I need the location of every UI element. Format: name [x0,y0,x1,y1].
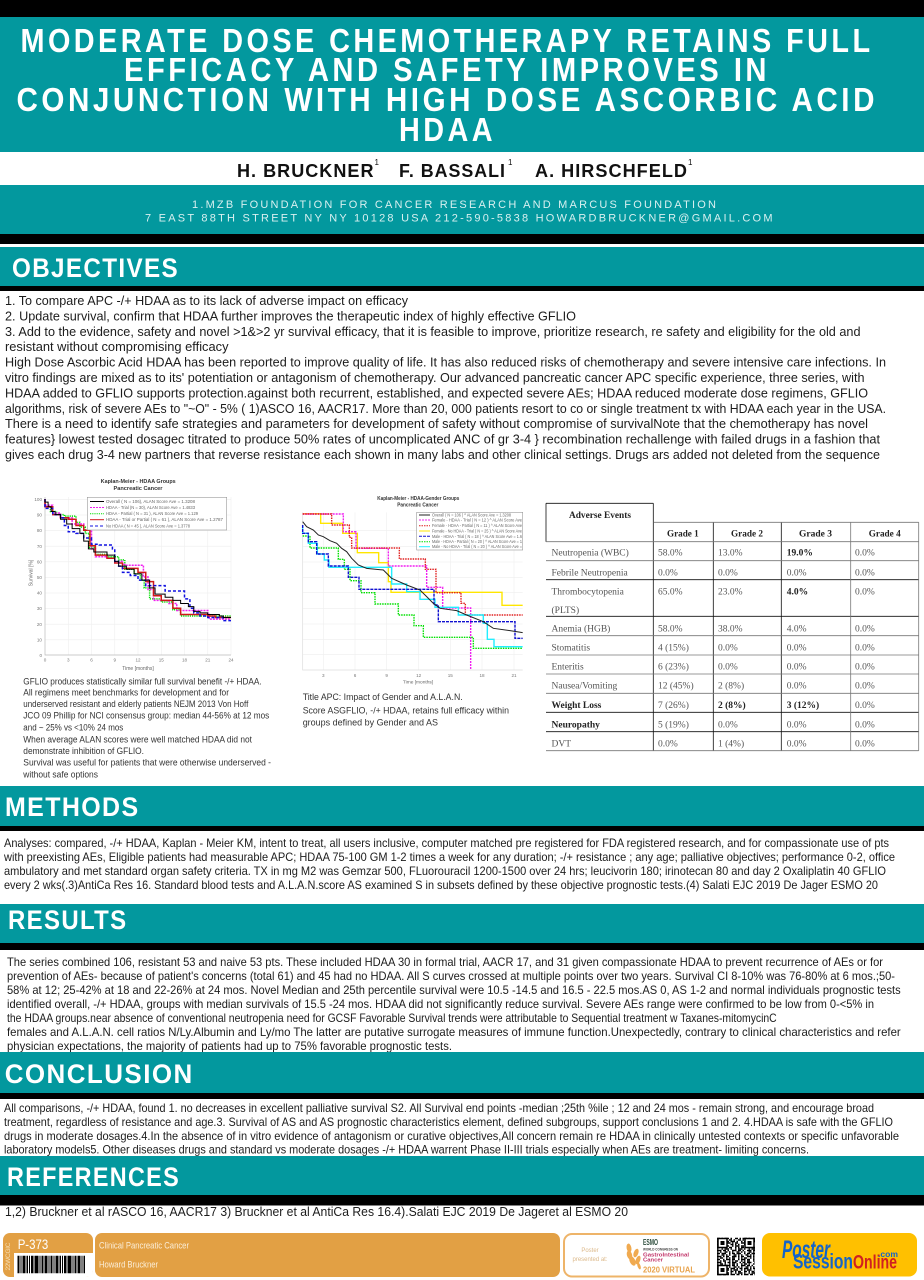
affiliation band: 7 EAST 88TH STREET NY NY 10128 USA 212-590-5838 HOWARDBRUCKNER@GMAIL.COM [145,212,772,224]
chart: Kaplan-Meier HDAA groups: 24 [228,658,234,662]
table header: Grade 4 [869,530,901,540]
chart: Kaplan-Meier HDAA gender groups: 9 [385,673,388,678]
title: EFFICACY AND SAFETY IMPROVES IN [124,52,770,89]
table rows: 0.0% [855,682,875,692]
table rows: 58.0% [658,624,683,634]
chart: Kaplan-Meier HDAA groups: 70 [37,544,42,549]
table rows: 0.0% [658,569,678,579]
icon: wheat [626,1243,642,1270]
table rows: 0.0% [855,624,875,634]
table rows: 1 (4%) [718,739,744,750]
chart: Kaplan-Meier HDAA gender groups: Time [months] [403,680,433,686]
authors: 1 [374,158,380,167]
table rows: 0.0% [855,701,875,711]
chart legend [87,497,227,530]
title [16,23,878,149]
chart legend: Overall ( N = 106), ALAN Score Ave = 1.3208 [106,499,196,504]
chart: Kaplan-Meier HDAA groups: 10 [37,637,42,642]
chart legend: Female - No HDAA - Trial ( N = 25 ) ^ ALAN Score Ave [432,528,522,534]
footer: congress badge: 2020 VIRTUAL [643,1265,695,1274]
chart legend: Male - HDAA - Partial ( N = 20 ) ^ ALAN Score Ave = 1 [432,539,522,544]
objectives text: HDAA added to GFLIO supports protection.against both recurrent, established, and expected severe AEs; HDAA reduced moderate dose regimens, GFLIO [5,386,868,400]
table rows: 0.0% [658,740,678,750]
table rows: 58.0% [658,549,683,559]
chart: Kaplan-Meier HDAA groups: 3 [67,658,70,662]
table rows: 0.0% [787,740,807,750]
icon: barcode [18,1256,85,1273]
table rows: 38.0% [718,624,743,634]
table rows: 23.0% [718,588,743,598]
authors: F. BASSALI [399,161,506,181]
chart: Kaplan-Meier HDAA gender groups [303,496,523,686]
footer: congress badge: GastroIntestinal [643,1253,690,1259]
chart: Kaplan-Meier HDAA gender groups: 12 [416,673,422,678]
references text: 1,2) Bruckner et al rASCO 16, AACR17 3) Bruckner et al AntiCa Res 16.4).Salati EJC 2019 De Jageret al ESMO 20 [5,1205,628,1219]
caption: chart one: underserved resistant and elderly patients NEJM 2013 Von Hoff [23,699,249,709]
objectives text: vitro findings are mixed as to its' potentiation or antagonism of chemotherapy. Our advanced pancreatic cancer APC specific experience, three series, with [5,371,865,385]
footer: topic and presenter: Clinical Pancreatic Cancer [99,1240,189,1250]
heading: references: REFERENCES [7,1162,180,1192]
table rows: 6 (23%) [658,662,689,673]
chart: Kaplan-Meier HDAA groups: 0 [44,658,47,662]
table rows: 0.0% [855,720,875,730]
results text: females and A.L.A.N. cell ratios N/Ly.Albumin and Ly/mo The latter are putative surrogate measures of immune function.Unexpectedly, contrary to clinical characteristics and refer [7,1025,901,1039]
table rows: 4.0% [787,624,807,634]
objectives text [5,294,886,462]
chart: Kaplan-Meier HDAA groups: 100 [34,497,42,502]
chart: Kaplan-Meier HDAA groups: 20 [37,622,42,627]
logo: Poster Session Online [762,1233,917,1276]
table rows: 0.0% [855,588,875,598]
table rows: 3 (12%) [787,700,819,711]
table rows: 0.0% [855,663,875,673]
table rows: 0.0% [787,682,807,692]
caption: chart two: Score ASGFLIO, -/+ HDAA, retains full efficacy within [303,706,509,716]
chart: Kaplan-Meier HDAA groups: 12 [135,658,141,662]
table rows: 0.0% [787,720,807,730]
chart legend [417,512,523,550]
table header: Grade 1 [667,530,699,540]
chart legend: No HDAA ( N = 45 ), ALAN Score Ave = 1.3778 [106,524,191,528]
footer: topic and presenter: Howard Bruckner [99,1260,158,1270]
caption: chart two: groups defined by Gender and AS [303,718,438,728]
table rows: 65.0% [658,588,683,598]
objectives text: algorithms, risk of severe AEs to "~O" - 5% ( 1)ASCO 16, AACR17. More than 20, 000 patients resort to co or single treatment tx with HDAA each year in the USA. [5,402,886,416]
heading: conclusion: CONCLUSION [5,1059,194,1089]
authors: A. HIRSCHFELD [535,161,688,181]
caption: chart one: When average ALAN scores were well matched HDAA did not [23,734,253,744]
table rows: Enteritis [552,663,584,673]
heading: methods [0,786,924,831]
results text: the HDAA groups.near absence of conventional neutropenia need for GCSF Favorable Survival trends were attributable to Sequential treatment w Taxanes-mitomycinC [7,1011,777,1025]
table rows: 0.0% [787,569,807,579]
footer: congress badge: Poster [581,1248,599,1254]
caption: chart two [303,692,509,728]
chart: Kaplan-Meier HDAA gender groups: 15 [448,673,453,678]
caption: chart two: Title APC: Impact of Gender and A.L.A.N. [303,692,463,702]
table header: Adverse Events [569,511,631,521]
table rows: 2 (8%) [718,681,744,692]
chart: Kaplan-Meier HDAA groups: Time [months] [122,666,154,672]
table rows: 0.0% [855,644,875,654]
conclusion text [4,1101,899,1156]
logo: Poster Session Online: Online [853,1252,897,1274]
table rows: 0.0% [718,644,738,654]
methods text [3,836,895,892]
chart: Kaplan-Meier HDAA gender groups: 18 [479,673,485,678]
chart: Kaplan-Meier HDAA groups: Pancreatic Cancer [114,486,163,492]
chart: Kaplan-Meier HDAA groups: 40 [37,591,42,596]
table rows: 5 (19%) [658,719,689,730]
caption: chart one: demonstrate inhibition of GFLIO. [23,746,144,756]
caption: chart one [22,677,271,779]
heading: objectives [0,247,924,291]
chart legend: HDAA - Trial or Partial ( N = 61 ), ALAN Score Ave = 1.2787 [106,517,224,522]
heading: objectives: OBJECTIVES [12,253,179,283]
table rows: 12 (45%) [658,681,694,692]
table rows: (PLTS) [552,605,579,616]
table rows: 0.0% [718,720,738,730]
chart: Kaplan-Meier HDAA groups: 18 [182,658,187,662]
table rows: 4 (15%) [658,643,689,654]
authors: 1 [688,158,693,167]
footer: poster id and barcode: 22WCGIC [5,1242,12,1270]
table rows: Neutropenia (WBC) [552,548,629,559]
chart: Kaplan-Meier HDAA gender groups: 6 [354,673,357,678]
table rows: 0.0% [855,549,875,559]
table rows: 0.0% [855,569,875,579]
affiliation band [0,185,924,244]
objectives text: 2. Update survival, confirm that HDAA further improves the therapeutic index of highly effective GFLIO [5,309,576,323]
caption: chart one: JCO 09 Phillip for NCI consensus group: median 44-56% at 12 mos [23,711,270,721]
chart legend: HDAA - Trial (N = 30), ALAN Score Ave = 1.4833 [106,505,196,510]
footer: poster id and barcode [3,1233,93,1277]
table rows: 0.0% [787,663,807,673]
chart: Kaplan-Meier HDAA groups: 90 [37,513,42,518]
chart: Kaplan-Meier HDAA groups: 0 [39,653,42,658]
table rows: 0.0% [787,644,807,654]
chart: Kaplan-Meier HDAA groups [28,479,234,672]
heading: results: RESULTS [8,905,128,935]
results text: physician expectations, the majority of patients had up to 75% favorable prognostic tests. [7,1039,452,1053]
logo: Poster Session Online: Poster [782,1236,831,1264]
chart: Kaplan-Meier HDAA groups: 21 [205,658,211,662]
footer: poster id and barcode: P-373 [18,1237,48,1252]
chart: Kaplan-Meier HDAA groups: 6 [90,658,93,662]
table rows: Nausea/Vomiting [552,682,618,692]
authors: H. BRUCKNER [237,161,374,181]
table rows: 0.0% [718,663,738,673]
objectives text: 1. To compare APC -/+ HDAA as to its lack of adverse impact on efficacy [5,294,409,308]
table rows: Thrombocytopenia [552,588,625,598]
objectives text: 3. Add to the evidence, safety and novel >1&>2 yr survival efficacy, that it is feasible to improve, prioritize research, re safety and eligibility for the old and [5,325,861,339]
table rows: 7 (26%) [658,700,689,711]
table header: Grade 2 [731,530,763,540]
chart legend: Female - HDAA - Partial ( N = 11 ) ^ ALAN Score Ave [432,523,522,528]
caption: chart one: Survival was useful for patients that were otherwise underserved - [23,757,271,767]
logo: Poster Session Online: .com [878,1250,898,1259]
affiliation band: 1.MZB FOUNDATION FOR CANCER RESEARCH AND MARCUS FOUNDATION [192,199,716,211]
caption: chart one: and ~ 25% vs <10% 24 mos [23,722,124,732]
caption: chart one: All regimens meet benchmarks for development and for [23,688,229,698]
icon: QR code [717,1238,755,1274]
chart: Kaplan-Meier HDAA groups: Kaplan-Meier - HDAA Groups [101,479,176,485]
chart: Kaplan-Meier HDAA groups: 80 [37,528,42,533]
chart: Kaplan-Meier HDAA groups: 60 [37,559,42,564]
chart: Kaplan-Meier HDAA groups: Survival [%] [28,559,34,586]
heading: methods: METHODS [5,792,140,822]
chart legend: Overall ( N = 106 ) ^ ALAN Score Ave = 1.3208 [432,512,511,518]
table rows: 2 (8%) [718,700,746,711]
chart: Kaplan-Meier HDAA groups: 15 [159,658,164,662]
chart legend: Female - HDAA - Trial ( N = 12 ) ^ ALAN Score Ave [432,518,523,522]
table rows: Febrile Neutropenia [552,569,629,579]
footer: topic and presenter [95,1233,560,1277]
heading: results [0,904,924,950]
chart legend: Male - HDAA - Trial ( N = 18 ) ^ ALAN Score Ave = 1.6 [432,534,522,539]
table rows [552,548,875,750]
table: adverse events [546,503,919,751]
chart: Kaplan-Meier HDAA groups: 50 [37,575,42,580]
authors: 1 [508,158,513,167]
table header: Grade 3 [799,530,832,540]
table rows: DVT [552,740,571,750]
footer: congress badge: Cancer [643,1258,664,1264]
table rows: Anemia (HGB) [552,623,610,634]
authors [237,158,693,181]
objectives text: There is a need to identify safe strategies and parameters for development of safety without compromise of survivalNote that the chemotherapy has novel [5,417,868,431]
table rows: 0.0% [855,740,875,750]
table rows: Stomatitis [552,644,590,654]
chart: Kaplan-Meier HDAA groups: 30 [37,606,42,611]
footer: congress badge: WORLD CONGRESS ON [643,1248,679,1252]
chart: Kaplan-Meier HDAA gender groups: Pancreatic Cancer [397,502,438,508]
footer: congress badge: presented at: [572,1257,608,1263]
chart: Kaplan-Meier HDAA gender groups: 21 [511,673,517,678]
table rows: Weight Loss [552,701,602,711]
conclusion text: laboratory models5. Other diseases drugs and standard vs moderate dosages -/+ HDAA warrent Phase II-III trials especially when AEs are treatment- limiting concerns. [4,1142,809,1156]
title: HDAA [399,112,496,149]
objectives text: features} lowest tested dosagec titrated to produce 50% rates of uncomplicated ANC of gr 3-4 } recombination rechallenge with failed drugs in a fashion that [5,433,881,447]
objectives text: resistant without compromising efficacy [5,340,229,354]
results text: identified overall, -/+ HDAA, groups with median survivals of 15.5 -24 mos. HDAA did not significantly reduce survival. Severe AEs range were confirmed to be low from 0-<5% in [7,997,874,1011]
objectives text: gives each drug 3-4 new partners that reverse resistance each shown in many labs and other clinical settings. Drugs ars added not deleted from the sequence [5,448,880,462]
chart legend: HDAA - Partial ( N = 31 ), ALAN Score Ave = 1.129 [106,511,199,516]
chart legend: Male - No HDAA - Trial ( N = 20 ) ^ ALAN Score Ave = [432,544,522,549]
chart: Kaplan-Meier HDAA gender groups: Kaplan-Meier - HDAA-Gender Groups [377,496,459,502]
logo: Poster Session Online: Session [793,1250,853,1274]
chart: Kaplan-Meier HDAA gender groups: 3 [322,673,325,678]
table rows: 13.0% [718,549,743,559]
heading: references [0,1156,924,1206]
results text [7,955,901,1053]
caption: chart one: GFLIO produces statistically similar full survival benefit -/+ HDAA. [23,677,262,687]
footer: congress badge: ESMO [643,1238,658,1247]
table header [569,511,901,540]
chart: Kaplan-Meier HDAA groups: 9 [114,658,117,662]
caption: chart one: without safe options [22,769,99,779]
table rows: 19.0% [787,549,813,559]
heading: conclusion [0,1052,924,1099]
objectives text: High Dose Ascorbic Acid HDAA has been reported to improve quality of life. It has also reduced risks of chemotherapy and severe intensive care infections. In [5,356,886,370]
footer: congress badge [564,1234,709,1276]
table rows: 4.0% [787,588,808,598]
table rows: Neuropathy [552,720,600,730]
table rows: 0.0% [718,569,738,579]
poster header banner [0,0,924,152]
